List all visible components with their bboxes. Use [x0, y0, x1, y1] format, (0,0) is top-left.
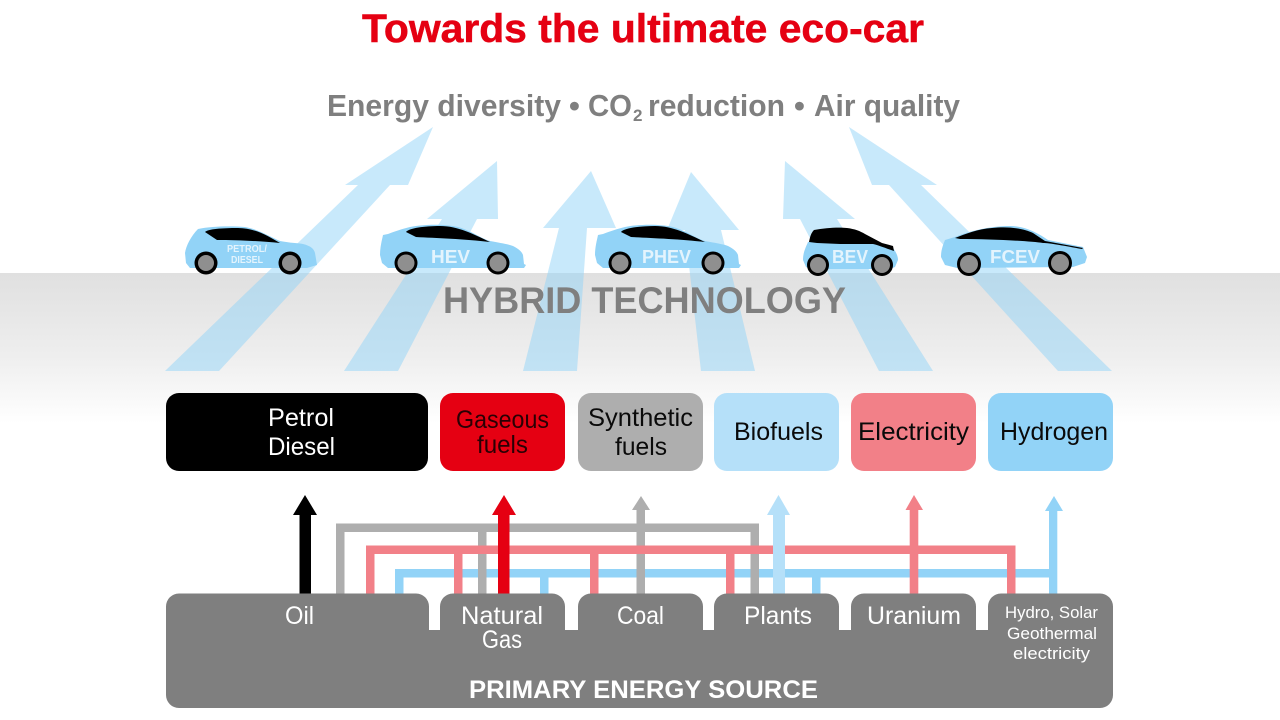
fuel box: biofuels: Biofuels: [734, 418, 823, 446]
source label: plants: Plants: [744, 602, 812, 630]
source label: uranium: Uranium: [867, 602, 961, 630]
arrow: uranium to electricity: [906, 495, 923, 595]
arrow: renewables to hydrogen: [1045, 496, 1063, 595]
car: petrol/diesel: [185, 226, 317, 274]
source label: natural gas: Natural: [461, 602, 543, 630]
pink connector network: [366, 546, 1016, 594]
arrow: natural gas to gaseous fuels: [492, 495, 516, 595]
car: BEV: BEV: [832, 247, 868, 267]
car: petrol/diesel: DIESEL: [231, 255, 263, 266]
background gradient band: [0, 273, 1280, 423]
fuel box: electricity: [851, 393, 976, 471]
fuel box: synthetic fuels: Synthetic: [588, 404, 693, 432]
fuel box: gaseous fuels: fuels: [477, 431, 528, 459]
subtitle: goals: •: [569, 88, 580, 123]
subtitle: goals: [327, 88, 961, 125]
subtitle: goals: Air quality: [814, 88, 961, 123]
heading: hybrid technology: HYBRID TECHNOLOGY: [443, 280, 846, 321]
car: BEV: [803, 228, 898, 276]
title: Towards the ultimate eco-car: [362, 7, 924, 51]
fuel box: hydrogen: [988, 393, 1113, 471]
car: PHEV: PHEV: [642, 247, 691, 267]
subtitle: goals: •: [794, 88, 805, 123]
source label: natural gas: Gas: [482, 626, 522, 654]
pale blue arrows rising from fuels to goals: [165, 127, 1112, 371]
fuel box: petrol and diesel: [166, 393, 428, 471]
fuel box: gaseous fuels: Gaseous: [456, 406, 549, 434]
panel: primary energy source: [166, 594, 1113, 708]
panel heading: primary energy source: PRIMARY ENERGY SOURCE: [469, 676, 818, 704]
source label: natural gas: [461, 602, 543, 654]
subtitle: goals: Energy diversity: [327, 88, 562, 123]
source label: hydro, solar, geothermal electricity: [1005, 603, 1098, 663]
arrow: oil to petrol and diesel: [293, 495, 317, 595]
subtitle: goals: CO: [588, 88, 632, 123]
car: HEV: [380, 225, 526, 274]
fuel box: biofuels: [714, 393, 839, 471]
source label: coal: Coal: [617, 602, 664, 630]
grey connector network: [336, 524, 759, 594]
subtitle: goals: reduction: [648, 88, 785, 123]
car: petrol/diesel: PETROL/: [227, 244, 267, 255]
arrow: coal to synthetic fuels: [632, 496, 650, 595]
fuel box: hydrogen: Hydrogen: [1000, 418, 1108, 446]
fuel box: electricity: Electricity: [858, 418, 970, 446]
subtitle: goals: 2: [633, 106, 642, 125]
source label: oil: Oil: [285, 602, 314, 630]
source label: hydro, solar, geothermal electricity: Geothermal: [1007, 624, 1097, 643]
fuel box: synthetic fuels: [578, 393, 703, 471]
fuel box: petrol and diesel: Diesel: [268, 433, 335, 461]
fuel box: gaseous fuels: [440, 393, 565, 471]
fuel box: synthetic fuels: fuels: [615, 433, 667, 461]
blue connector network: [395, 569, 1057, 595]
source label: hydro, solar, geothermal electricity: Hydro, Solar: [1005, 603, 1098, 622]
fuel box: petrol and diesel: Petrol: [268, 404, 334, 432]
car: FCEV: [941, 226, 1087, 276]
arrow: plants to biofuels: [767, 495, 790, 595]
car: FCEV: FCEV: [990, 247, 1040, 267]
car: PHEV: [595, 225, 741, 274]
car: HEV: HEV: [431, 247, 470, 267]
source label: hydro, solar, geothermal electricity: electricity: [1013, 644, 1091, 663]
